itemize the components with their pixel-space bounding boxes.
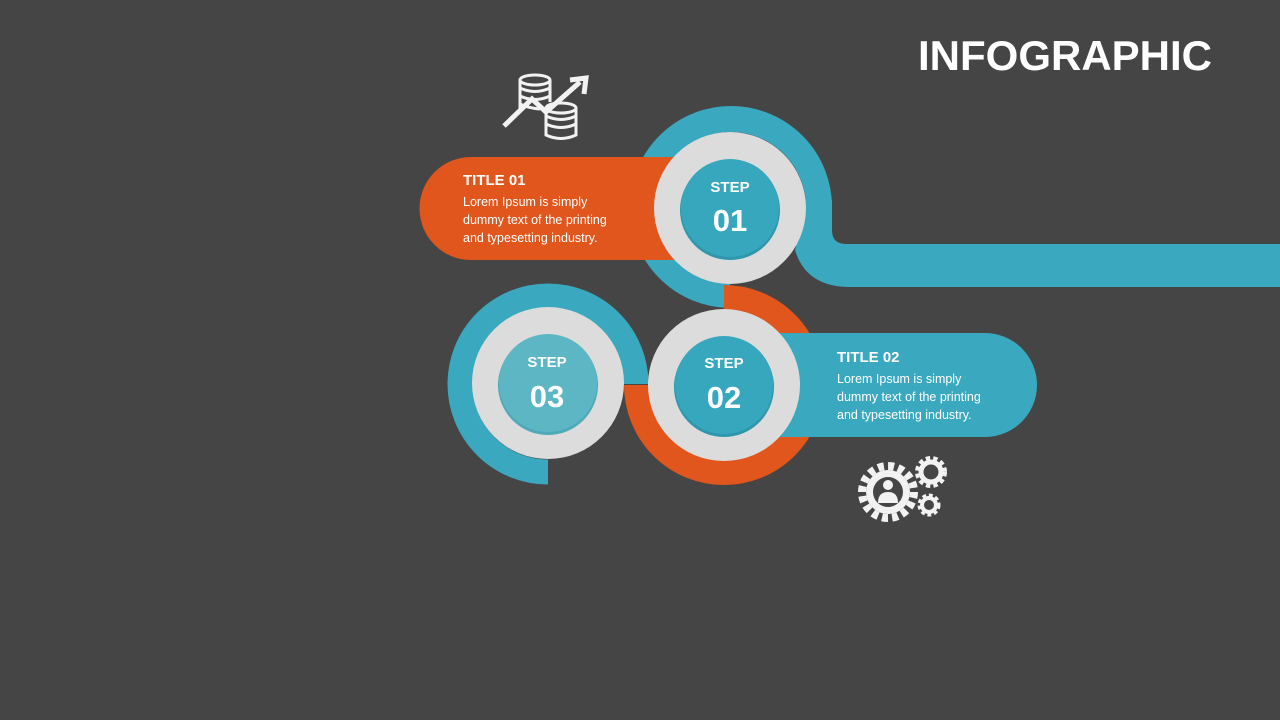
panel: title 02 (770, 333, 1037, 437)
panel: title 01: dummy text of the printing (463, 213, 607, 227)
step 01 circle: STEP (710, 179, 750, 196)
icon: coins growth (504, 75, 586, 138)
panel: title 02: TITLE 02 (837, 349, 900, 366)
step 01 circle (654, 132, 806, 284)
step 03 circle: 03 (530, 379, 564, 414)
step 01 circle: 01 (713, 203, 747, 238)
step 02 circle: STEP (704, 355, 744, 372)
icon: gears with person (862, 459, 944, 518)
step 03 circle (472, 307, 624, 459)
step 03 circle: STEP (527, 354, 567, 371)
panel: title 01: TITLE 01 (463, 172, 526, 189)
step 02 circle: 02 (707, 380, 741, 415)
title: INFOGRAPHIC (918, 32, 1212, 79)
panel: title 01: and typesetting industry. (463, 231, 598, 245)
orange track step 02 (637, 298, 811, 472)
blue track step 01 (643, 119, 1280, 295)
panel: title 02: and typesetting industry. (837, 408, 972, 422)
panel: title 02: dummy text of the printing (837, 390, 981, 404)
panel: title 02: Lorem Ipsum is simply (837, 372, 962, 386)
blue track step 03 (460, 296, 636, 472)
panel: title 01: Lorem Ipsum is simply (463, 195, 588, 209)
panel: title 01 (420, 157, 680, 260)
step 02 circle (648, 309, 800, 461)
